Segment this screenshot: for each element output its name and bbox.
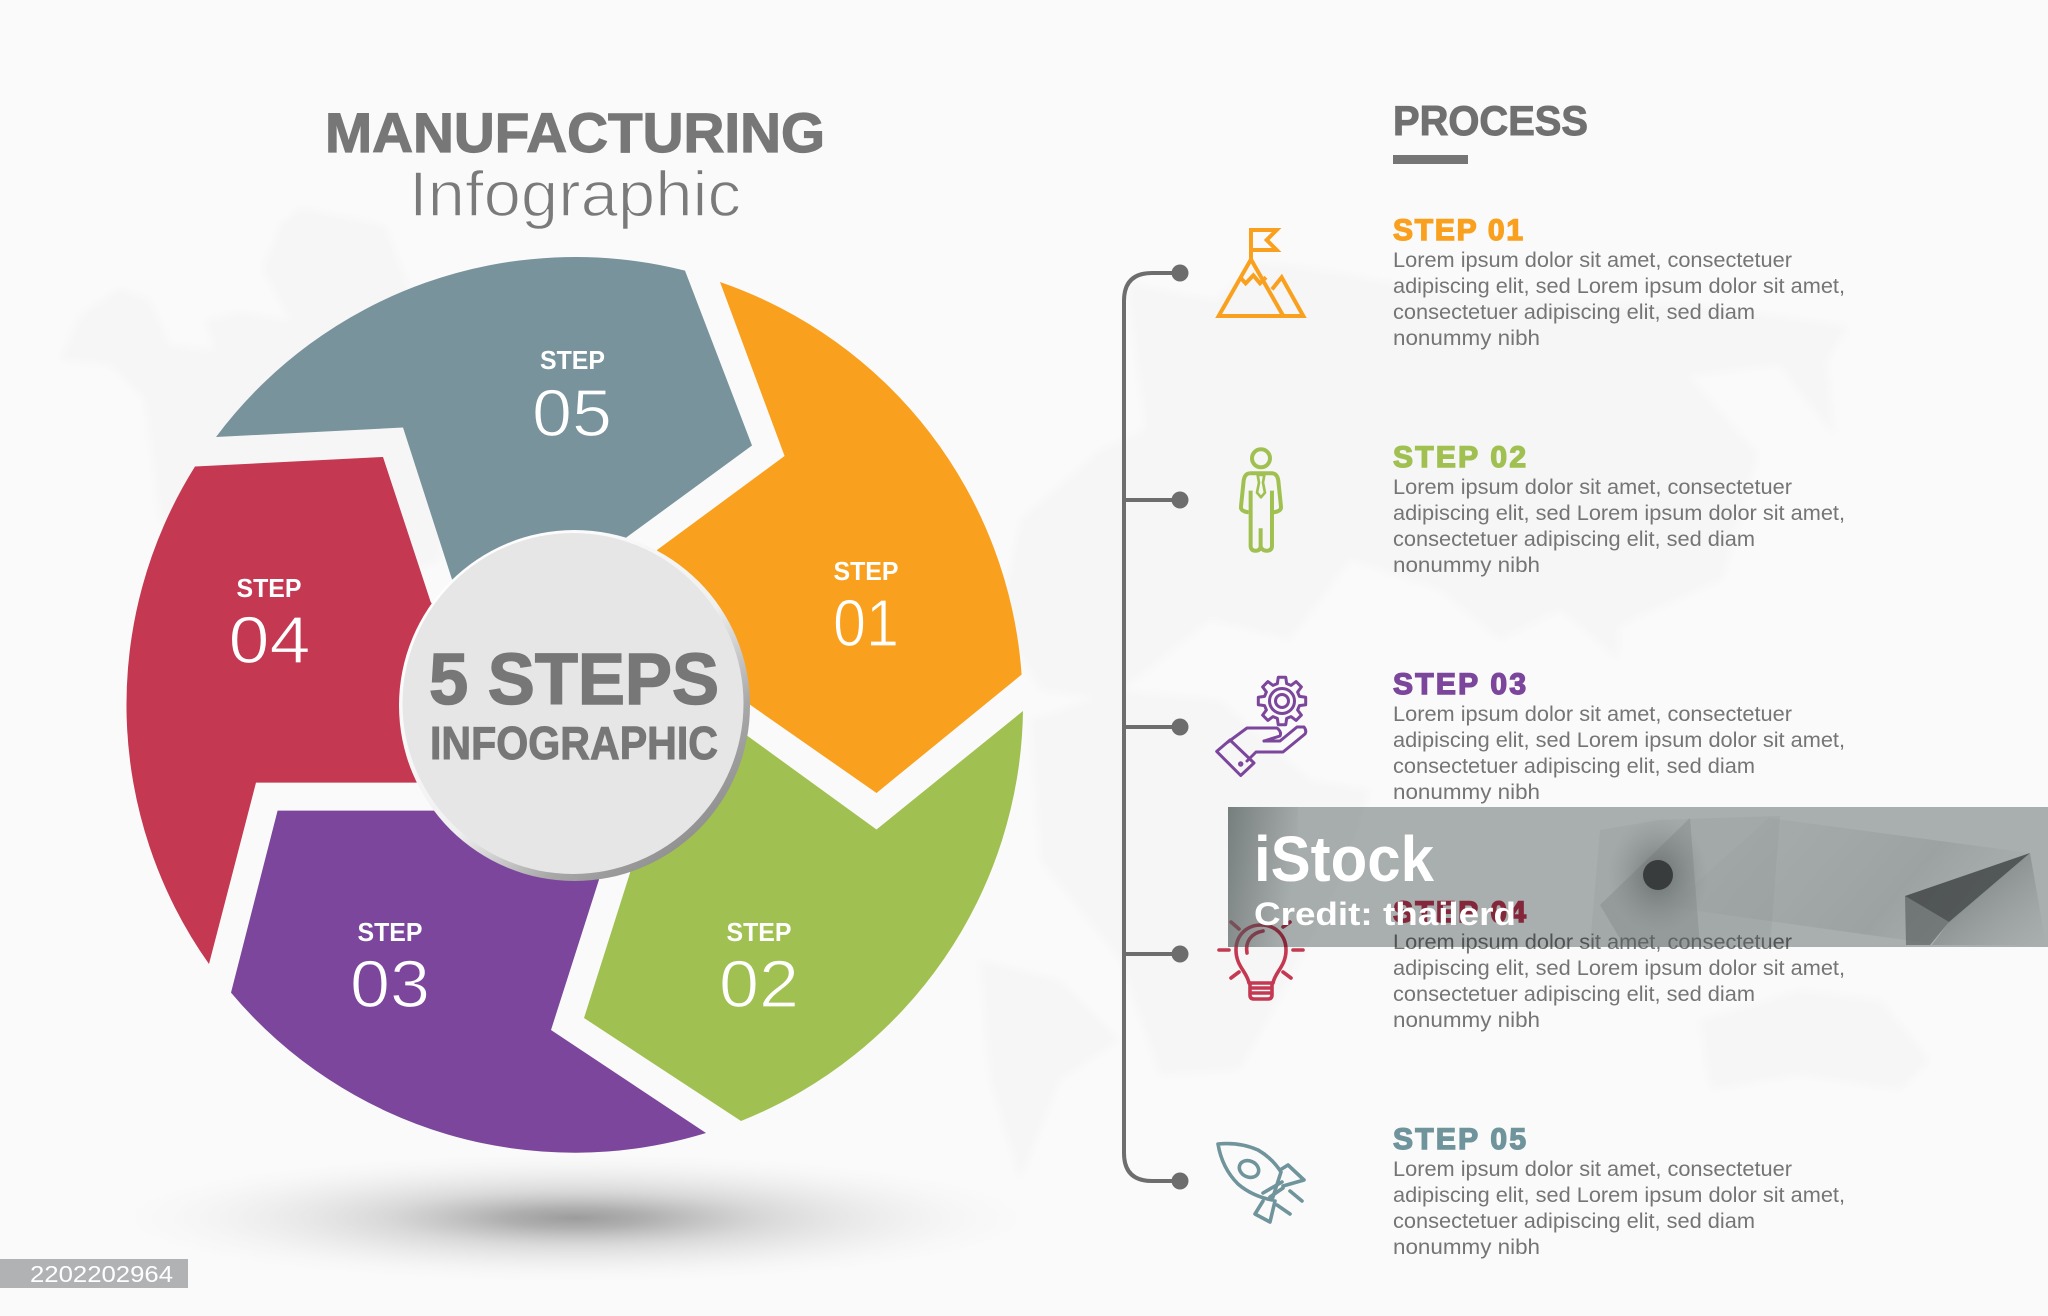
step 02 text: STEP 02 xyxy=(1393,441,1526,474)
step 04 text: nonummy nibh xyxy=(1393,1009,1540,1032)
title: Infographic xyxy=(409,158,741,230)
step 02 text xyxy=(1393,441,1845,577)
segment: step 05: STEP xyxy=(540,345,605,375)
step 03 text: consectetuer adipiscing elit, sed diam xyxy=(1393,755,1755,778)
segment: step 01: STEP xyxy=(834,556,898,586)
step 03 text: Lorem ipsum dolor sit amet, consectetuer xyxy=(1393,703,1792,726)
step 02 text: nonummy nibh xyxy=(1393,554,1540,577)
step 05 text: adipiscing elit, sed Lorem ipsum dolor sit amet, xyxy=(1393,1184,1845,1207)
step 05 text: consectetuer adipiscing elit, sed diam xyxy=(1393,1210,1755,1233)
step 04 text: consectetuer adipiscing elit, sed diam xyxy=(1393,983,1755,1006)
step 02 text: adipiscing elit, sed Lorem ipsum dolor sit amet, xyxy=(1393,502,1845,525)
segment: step 04 xyxy=(126,457,500,964)
step 03 text: STEP 03 xyxy=(1393,668,1526,701)
title xyxy=(325,101,825,230)
center badge: INFOGRAPHIC xyxy=(430,717,718,769)
step 03 text: adipiscing elit, sed Lorem ipsum dolor sit amet, xyxy=(1393,729,1845,752)
step 05 text: STEP 05 xyxy=(1393,1123,1526,1156)
segment: step 04: 04 xyxy=(228,603,310,678)
step 01 text: consectetuer adipiscing elit, sed diam xyxy=(1393,301,1755,324)
segment: step 05 xyxy=(216,257,752,650)
step 01 text: STEP 01 xyxy=(1393,214,1523,247)
step 04 text: Lorem ipsum dolor sit amet, consectetuer xyxy=(1393,931,1792,954)
step 05 text xyxy=(1393,1123,1845,1259)
watermark banner xyxy=(1228,807,2048,947)
segment: step 01 xyxy=(650,282,1022,793)
step 04 text: STEP 04 xyxy=(1393,896,1526,929)
segment: step 05: 05 xyxy=(532,376,612,451)
segment: step 02: 02 xyxy=(719,947,799,1022)
icon: mountain with flag xyxy=(1219,230,1303,316)
world map backdrop xyxy=(60,208,1930,1180)
segment: step 03: STEP xyxy=(358,917,422,947)
icon: rocket xyxy=(1218,1144,1304,1222)
step 03 text xyxy=(1393,668,1845,804)
segment: step 02 xyxy=(584,709,1023,1121)
step 03 text: nonummy nibh xyxy=(1393,781,1540,804)
step 01 text xyxy=(1393,214,1845,350)
segment wheel xyxy=(126,257,1023,1153)
segment: step 04: STEP xyxy=(236,573,302,603)
step 01 text: Lorem ipsum dolor sit amet, consectetuer xyxy=(1393,249,1792,272)
watermark credit: Credit: thailerd xyxy=(1254,896,1516,932)
segment: step 03 xyxy=(231,800,706,1153)
segment: step 02: STEP xyxy=(726,917,792,947)
step 02 text: consectetuer adipiscing elit, sed diam xyxy=(1393,528,1755,551)
image id tag: 2202202964 xyxy=(30,1261,173,1287)
watermark logo: iStock xyxy=(1254,823,1434,895)
timeline connector xyxy=(1124,264,1188,1190)
step 01 text: nonummy nibh xyxy=(1393,327,1540,350)
center badge xyxy=(399,530,750,881)
segment: step 01: 01 xyxy=(833,586,899,661)
process heading xyxy=(1393,97,1588,164)
step 01 text: adipiscing elit, sed Lorem ipsum dolor sit amet, xyxy=(1393,275,1845,298)
process heading: PROCESS xyxy=(1393,97,1588,144)
step 04 text xyxy=(1393,896,1845,1032)
icon: light bulb xyxy=(1219,922,1303,999)
step 04 text: adipiscing elit, sed Lorem ipsum dolor sit amet, xyxy=(1393,957,1845,980)
icon: businessman xyxy=(1241,449,1281,551)
ground shadow xyxy=(95,1150,1055,1286)
center badge: 5 STEPS xyxy=(429,640,719,720)
step 05 text: Lorem ipsum dolor sit amet, consectetuer xyxy=(1393,1158,1792,1181)
step 02 text: Lorem ipsum dolor sit amet, consectetuer xyxy=(1393,476,1792,499)
step 05 text: nonummy nibh xyxy=(1393,1236,1540,1259)
icon: hand holding gear xyxy=(1217,677,1306,776)
title: MANUFACTURING xyxy=(325,101,825,164)
segment: step 03: 03 xyxy=(350,947,430,1022)
image id tag xyxy=(0,1259,188,1288)
